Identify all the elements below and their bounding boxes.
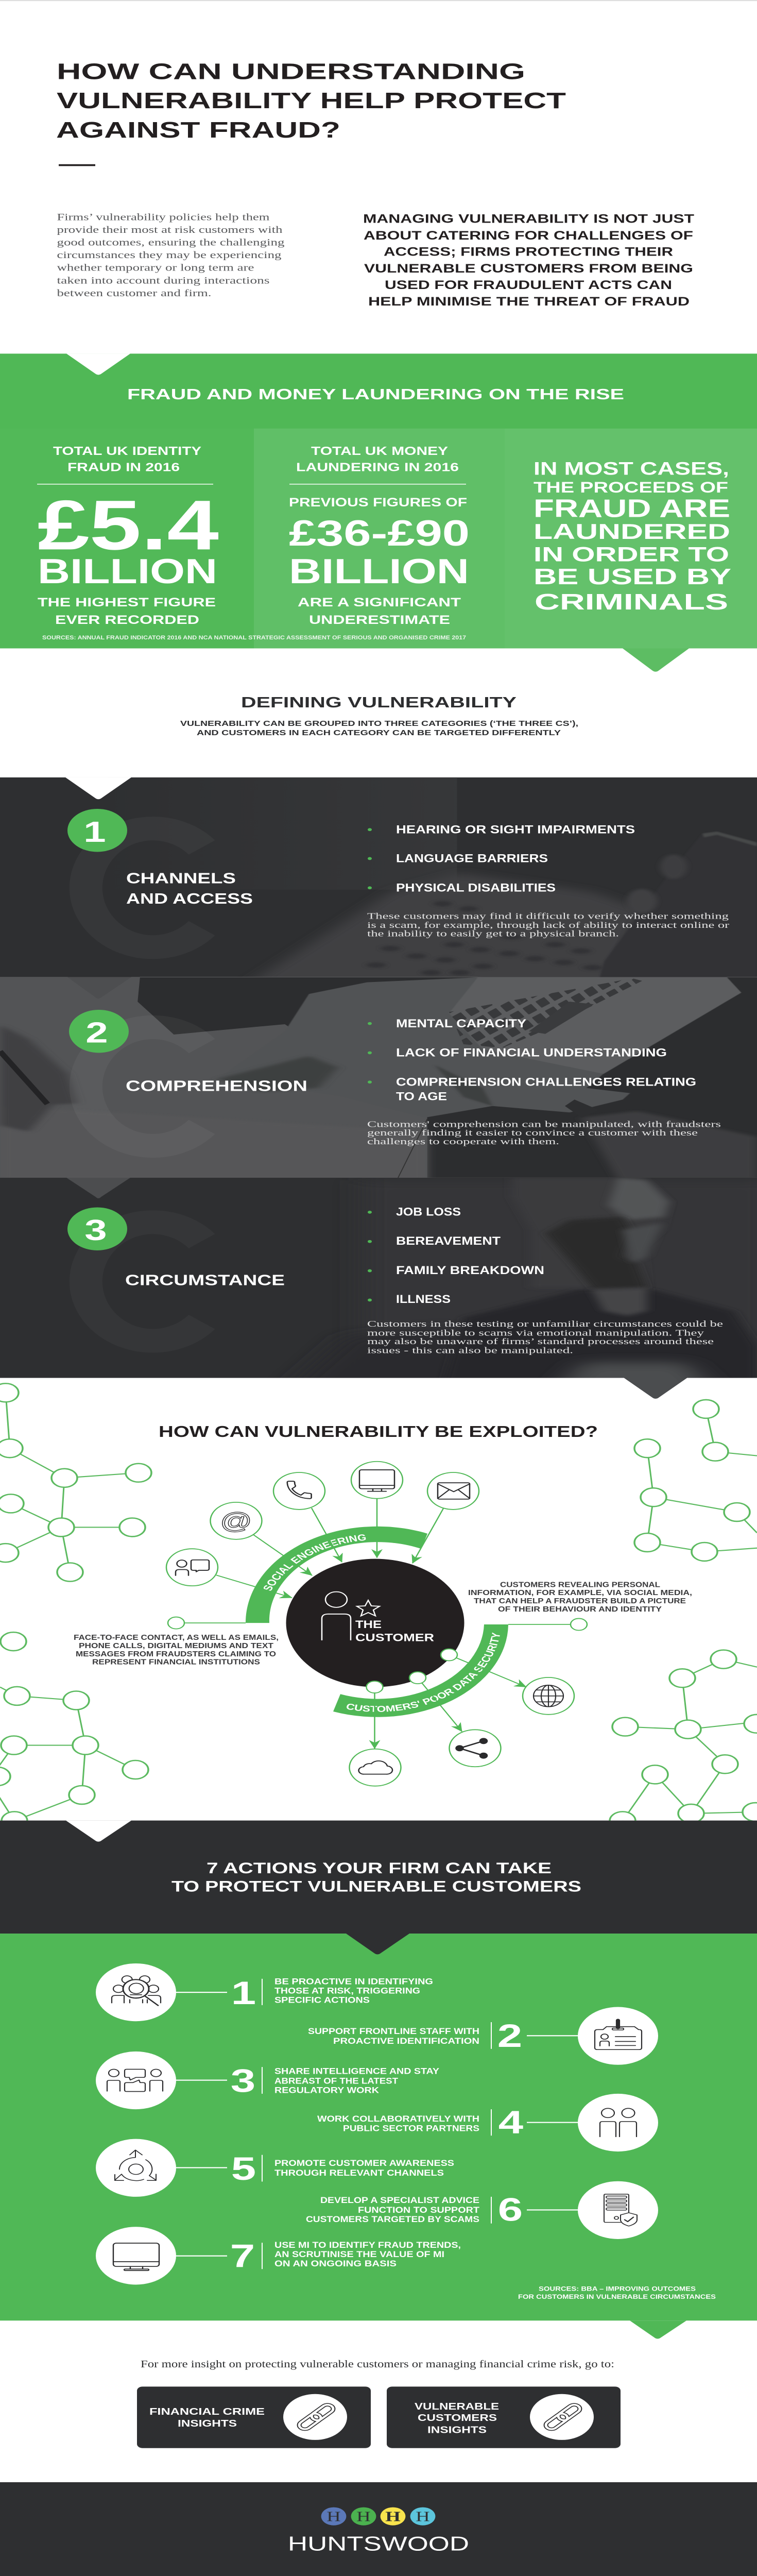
text: revealing personal information: CUSTOMERS REVEALING PERSONAL [500,1580,660,1589]
social engineering arc: SOCIAL ENGINEERING [264,1534,366,1591]
action 1 [96,1963,433,2021]
icon: monitor [351,1462,403,1499]
number badge 3: 3 [84,1214,107,1246]
stat: money laundering [289,444,470,627]
icon: globe [523,1677,574,1715]
panel: 7 actions [0,1934,757,2339]
button: financial crime insights: FINANCIAL CRIME [149,2406,265,2417]
key statement: USED FOR FRAUDULENT ACTS CAN [385,278,672,292]
button: financial crime insights [137,2386,371,2448]
stat: identity fraud: THE HIGHEST FIGURE [38,596,216,609]
heading: defining vulnerability: AND CUSTOMERS IN EACH CATEGORY CAN BE TARGETED DIFFERENTLY [197,728,561,737]
action 7: USE MI TO IDENTIFY FRAUD TRENDS, [274,2241,461,2250]
intro paragraph: Firms’ vulnerability policies help them [57,212,270,223]
action 1: BE PROACTIVE IN IDENTIFYING [274,1977,433,1987]
stat: identity fraud: FRAUD IN 2016 [67,461,180,473]
callout: proceeds of fraud: IN MOST CASES, [534,459,729,479]
decorative letter C [86,828,202,947]
sources note: FOR CUSTOMERS IN VULNERABLE CIRCUMSTANCES [518,2294,716,2300]
bullet list [368,1206,544,1306]
bullet list: LACK OF FINANCIAL UNDERSTANDING [396,1046,667,1059]
notch arrow [66,1821,131,1842]
number badge 1: 1 [83,816,106,848]
heading: circumstance: CIRCUMSTANCE [125,1272,285,1289]
heading: channels and access: AND ACCESS [126,891,253,907]
action 2 [308,2007,658,2065]
button: financial crime insights: INSIGHTS [178,2418,237,2429]
sources note: SOURCES: ANNUAL FRAUD INDICATOR 2016 AND NCA NATIONAL STRATEGIC ASSESSMENT OF SERIOUS AND ORGANISED CRIME 2017 [42,634,466,641]
heading: 7 actions [171,1859,581,1895]
text: revealing personal information: OF THEIR BEHAVIOUR AND IDENTITY [498,1604,662,1613]
icon: cloud [349,1749,401,1786]
icon: monitor [113,2243,159,2270]
action 6: FUNCTION TO SUPPORT [358,2206,480,2215]
icon: phone [273,1472,325,1510]
intro paragraph: provide their most at risk customers with [57,224,283,235]
callout: proceeds of fraud: FRAUD ARE [534,494,730,522]
stat: identity fraud: £5.4 [38,486,219,565]
stat: identity fraud: BILLION [38,552,217,591]
callout: proceeds of fraud [534,459,731,615]
decorative letter C [86,1027,202,1146]
background photo: hands, paper and laptop [0,977,757,1179]
text: face to face contact [74,1633,279,1666]
heading: defining vulnerability [180,694,578,737]
callout: proceeds of fraud: THE PROCEEDS OF [534,479,728,496]
action 4: PUBLIC SECTOR PARTNERS [343,2124,479,2133]
bullet list [368,1017,696,1103]
stat: money laundering: TOTAL UK MONEY [311,444,448,457]
icon: id badge [595,2019,642,2049]
description: Customers in these testing or unfamiliar circumstances could be [367,1318,723,1329]
text: revealing personal information [468,1580,692,1613]
bottom arrow [623,648,689,672]
bullet list: BEREAVEMENT [396,1234,501,1247]
icon: circular arrows [115,2150,156,2181]
decorative letter C [86,1222,202,1341]
heading: comprehension: COMPREHENSION [126,1078,307,1094]
title [56,59,566,143]
description: generally finding it easier to convince a customer with these [367,1127,698,1138]
logo: Huntswood: H [416,2509,430,2524]
key statement: ACCESS; FIRMS PROTECTING THEIR [384,245,673,259]
action 7 [96,2227,461,2284]
intro paragraph: good outcomes, ensuring the challenging [57,237,284,247]
footer [0,2482,757,2576]
text: face to face contact: PHONE CALLS, DIGITAL MEDIUMS AND TEXT [79,1641,273,1650]
action 4 [317,2094,658,2151]
action 1: THOSE AT RISK, TRIGGERING [274,1987,420,1996]
bullet list: MENTAL CAPACITY [396,1017,526,1030]
stat: money laundering: PREVIOUS FIGURES OF [289,496,467,510]
panel: circumstance [0,1178,757,1412]
title: AGAINST FRAUD? [56,118,340,143]
action 1: 1 [231,1975,256,2011]
background photo: man with hand on head [0,1178,757,1412]
edge nodes [367,1649,457,1693]
description: Customers' comprehension can be manipulated, with fraudsters [367,1119,721,1129]
action 5: 5 [231,2151,256,2187]
stat: money laundering: £36-£90 [289,513,470,554]
dark arrow [346,1934,409,1954]
action 6 [306,2181,658,2239]
stat: money laundering: LAUNDERING IN 2016 [296,461,459,473]
description: challenges to cooperate with them. [367,1136,559,1146]
description [367,911,729,939]
text: revealing personal information: INFORMATION, FOR EXAMPLE, VIA SOCIAL MEDIA, [468,1588,692,1597]
action 5: PROMOTE CUSTOMER AWARENESS [274,2159,454,2168]
network background [0,1383,757,1830]
stat: identity fraud [37,444,219,627]
callout: proceeds of fraud: BE USED BY [534,564,731,589]
icon: search people [112,1976,161,2006]
notch arrow [67,977,131,998]
sources note: SOURCES: BBA – IMPROVING OUTCOMES [539,2286,696,2293]
icon: server shield [604,2194,637,2226]
intro paragraph [57,212,284,298]
bullet list: TO AGE [396,1090,447,1103]
heading: 7 actions: 7 ACTIONS YOUR FIRM CAN TAKE [207,1859,552,1876]
heading: defining vulnerability: DEFINING VULNERABILITY [241,694,517,710]
heading: how can vulnerability be exploited: HOW CAN VULNERABILITY BE EXPLOITED? [159,1422,598,1440]
button: vulnerable customers insights: INSIGHTS [427,2425,487,2435]
arrows out of the customer [375,1655,526,1749]
description [367,1318,723,1355]
stat: money laundering: BILLION [289,552,469,591]
action 4: 4 [498,2105,523,2141]
icon: link [530,2394,594,2440]
customer label: THE [355,1619,382,1631]
description: issues - this can also be manipulated. [367,1345,573,1355]
icon: face to face [166,1549,218,1586]
diagram: the customer [74,1461,692,1787]
action 2: PROACTIVE IDENTIFICATION [333,2037,479,2046]
logo: Huntswood: H [385,2509,401,2524]
action 7: AN SCRUTINISE THE VALUE OF MI [274,2250,444,2259]
notch arrow [66,1178,130,1198]
arrows into the customer [184,1499,443,1623]
action 6: DEVELOP A SPECIALIST ADVICE [320,2196,479,2205]
description: is a scam, for example, through lack of ability to interact online or [367,920,729,930]
description: These customers may find it difficult to verify whether something [367,911,729,921]
customer label: CUSTOMER [355,1632,434,1643]
customers poor data security arc: CUSTOMERS' POOR DATA SECURITY [347,1632,500,1712]
key statement: VULNERABLE CUSTOMERS FROM BEING [364,261,693,276]
stat: identity fraud: EVER RECORDED [55,613,199,627]
bullet list: COMPREHENSION CHALLENGES RELATING [396,1076,696,1088]
action 5: THROUGH RELEVANT CHANNELS [274,2168,444,2178]
intro paragraph: taken into account during interactions [57,275,269,286]
title underline dash [59,164,95,166]
icon: at sign [210,1502,262,1539]
icon: two people [600,2108,636,2137]
panel: comprehension [0,977,757,1179]
bullet list: PHYSICAL DISABILITIES [396,882,556,894]
title: HOW CAN UNDERSTANDING [57,59,525,84]
bullet list: FAMILY BREAKDOWN [396,1264,544,1277]
number badge 2 [69,1010,129,1053]
stat: money laundering: ARE A SIGNIFICANT [298,596,461,609]
action 3 [96,2052,440,2109]
action 2: SUPPORT FRONTLINE STAFF WITH [308,2027,479,2036]
notch arrow [65,777,131,799]
callout: proceeds of fraud: LAUNDERED [534,519,730,544]
bottom arrow [630,2320,686,2339]
icon: mail [427,1472,479,1510]
action 7: 7 [230,2238,255,2275]
panel: channels and access [0,775,757,994]
title: VULNERABILITY HELP PROTECT [57,89,566,113]
description: more susceptible to scams via emotional manipulation. They [367,1328,704,1338]
heading: channels and access [126,870,253,907]
callout: proceeds of fraud: CRIMINALS [535,589,728,615]
action 6: 6 [498,2192,523,2228]
button: vulnerable customers insights [387,2386,621,2448]
logo: Huntswood: HUNTSWOOD [288,2532,469,2555]
action 3: REGULATORY WORK [274,2086,380,2095]
action 3: ABREAST OF THE LATEST [274,2076,399,2086]
action 6: CUSTOMERS TARGETED BY SCAMS [306,2215,479,2224]
button: vulnerable customers insights: CUSTOMERS [418,2413,497,2423]
callout: proceeds of fraud: IN ORDER TO [534,543,729,566]
panel: 7 actions heading [0,1821,757,1934]
action 4: WORK COLLABORATIVELY WITH [317,2114,479,2124]
description [367,1119,721,1146]
heading: fraud and money laundering: FRAUD AND MONEY LAUNDERING ON THE RISE [127,386,624,403]
social engineering arc [246,1526,427,1623]
text: face to face contact: FACE-TO-FACE CONTACT, AS WELL AS EMAILS, [74,1633,279,1641]
text: face to face contact: MESSAGES FROM FRAUDSTERS CLAIMING TO [76,1649,276,1658]
icon: people talking [107,2069,163,2092]
logo: Huntswood: H [356,2509,371,2524]
notch arrow [66,353,130,375]
call to action text: For more insight on protecting vulnerable customers or managing financial crime risk, go to: [141,2359,614,2370]
bullet list: JOB LOSS [396,1206,461,1218]
logo: Huntswood [288,2507,469,2555]
connector line and node right [508,1618,587,1630]
action 2: 2 [497,2018,522,2054]
key statement [363,212,694,309]
action 5 [96,2139,454,2197]
customer label [355,1619,434,1643]
icon: share [449,1730,501,1767]
text: face to face contact: REPRESENT FINANCIAL INSTITUTIONS [92,1657,260,1666]
intro paragraph: circumstances they may be experiencing [57,249,281,260]
background photo: laptop and phone [0,775,757,994]
bullet list: HEARING OR SIGHT IMPAIRMENTS [396,823,635,836]
bullet list: LANGUAGE BARRIERS [396,852,548,865]
key statement: MANAGING VULNERABILITY IS NOT JUST [363,212,694,226]
action 1: SPECIFIC ACTIONS [274,1996,370,2005]
connector node left [168,1617,184,1629]
icon: link [283,2394,347,2440]
stat: identity fraud: TOTAL UK IDENTITY [53,444,201,457]
bullet list [368,823,635,894]
intro paragraph: whether temporary or long term are [57,262,254,273]
number badge 2: 2 [85,1016,108,1049]
heading: defining vulnerability: VULNERABILITY CAN BE GROUPED INTO THREE CATEGORIES (‘THE THREE CS’), [180,719,578,727]
text: revealing personal information: THAT CAN HELP A FRAUDSTER BUILD A PICTURE [474,1596,686,1605]
heading: 7 actions: TO PROTECT VULNERABLE CUSTOMERS [171,1878,581,1895]
bullet list: ILLNESS [396,1293,451,1306]
intro paragraph: between customer and firm. [57,287,211,298]
number badge 1 [67,809,127,852]
logo: Huntswood: H [326,2509,341,2524]
description: may also be unaware of firms’ standard processes around these [367,1336,714,1346]
stat: money laundering: UNDERESTIMATE [309,613,450,627]
key statement: ABOUT CATERING FOR CHALLENGES OF [364,228,693,243]
action 3: 3 [231,2063,255,2099]
heading: channels and access: CHANNELS [126,870,236,887]
icon: person with star [322,1592,380,1640]
action 7: ON AN ONGOING BASIS [274,2259,397,2268]
action 3: SHARE INTELLIGENCE AND STAY [274,2067,440,2076]
panel: fraud and money laundering [0,353,757,672]
sources note [518,2286,716,2300]
customer circle [286,1559,464,1687]
number badge 3 [67,1208,127,1250]
key statement: HELP MINIMISE THE THREAT OF FRAUD [368,294,690,309]
description: the inability to easily get to a physical branch. [367,928,619,939]
icon: at sign: @ [220,1509,252,1534]
button: vulnerable customers insights: VULNERABLE [415,2401,499,2412]
